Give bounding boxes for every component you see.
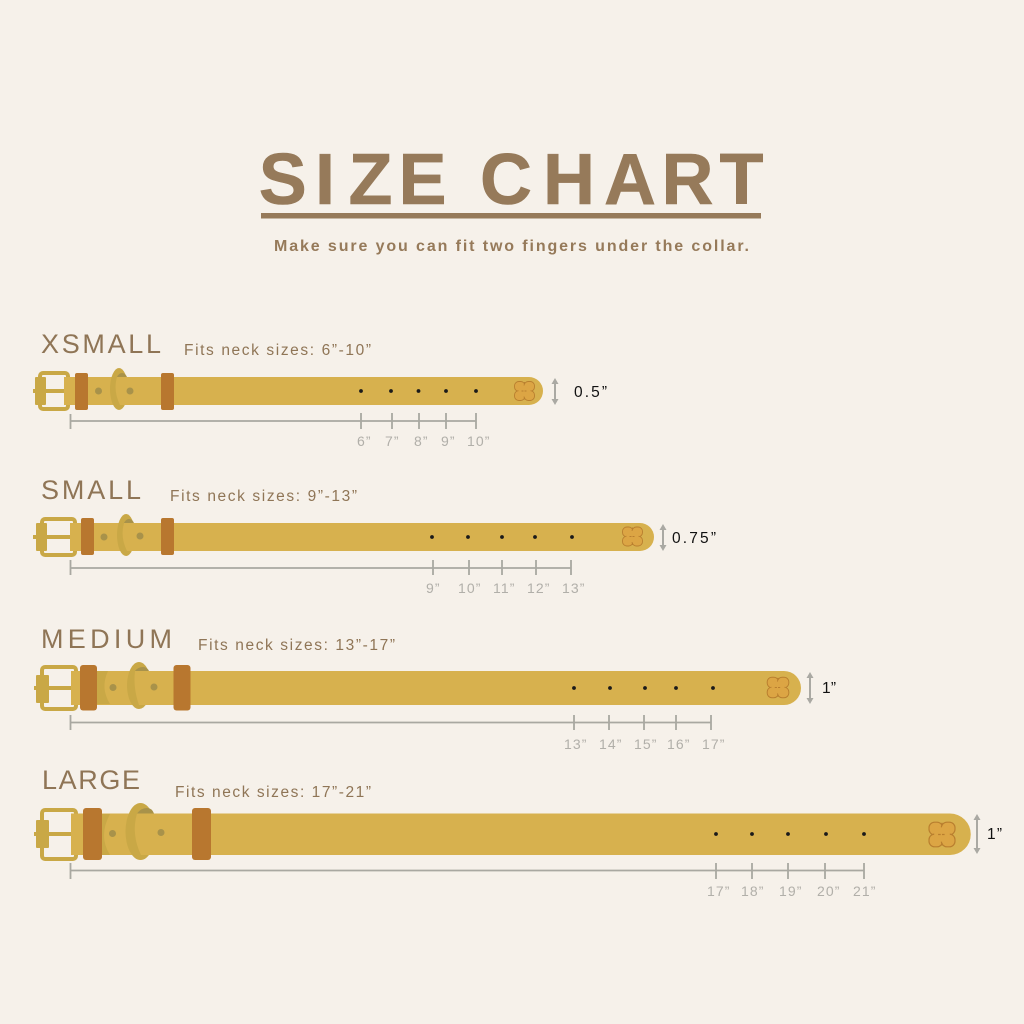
xsmall ruler labels — [357, 433, 491, 449]
xsmall ruler labels: 9” — [441, 433, 456, 449]
large ruler labels: 21” — [853, 883, 877, 899]
medium ruler labels: 17” — [702, 736, 726, 752]
small collar — [33, 514, 654, 556]
medium width arrow — [806, 672, 814, 704]
large ruler labels: 20” — [817, 883, 841, 899]
small heading: SMALL — [41, 475, 141, 505]
panel: xsmall — [33, 329, 607, 449]
large heading: LARGE — [42, 765, 140, 795]
medium ruler labels — [564, 736, 726, 752]
small width arrow — [660, 524, 666, 551]
medium ruler labels: 15” — [634, 736, 658, 752]
xsmall fit text: Fits neck sizes: 6”-10” — [184, 342, 371, 359]
large width arrow — [974, 814, 980, 854]
title: SIZE CHART — [0, 140, 764, 220]
large ruler labels: 17” — [707, 883, 731, 899]
medium collar — [34, 662, 801, 710]
small ruler labels: 12” — [527, 580, 551, 596]
small ruler labels: 13” — [562, 580, 586, 596]
medium fit text: Fits neck sizes: 13”-17” — [198, 637, 395, 654]
small ruler labels — [426, 580, 586, 596]
small fit text: Fits neck sizes: 9”-13” — [170, 488, 357, 505]
xsmall heading: XSMALL — [41, 329, 161, 359]
large ruler — [70, 863, 864, 879]
medium ruler labels: 14” — [599, 736, 623, 752]
medium heading: MEDIUM — [41, 624, 172, 654]
large ruler labels — [707, 883, 877, 899]
large fit text: Fits neck sizes: 17”-21” — [175, 784, 371, 801]
medium ruler labels: 16” — [667, 736, 691, 752]
panel: large — [34, 765, 1002, 899]
small width label: 0.75” — [672, 530, 716, 547]
xsmall ruler labels: 10” — [467, 433, 491, 449]
medium width label: 1” — [822, 680, 836, 697]
panel: medium — [34, 624, 836, 752]
small ruler — [70, 560, 571, 575]
subtitle: Make sure you can fit two fingers under the collar. — [274, 238, 749, 255]
large ruler labels: 18” — [741, 883, 765, 899]
title underline — [261, 213, 761, 218]
xsmall collar — [33, 368, 543, 410]
xsmall ruler labels: 7” — [385, 433, 400, 449]
xsmall width arrow — [552, 378, 558, 405]
xsmall width label: 0.5” — [574, 384, 607, 401]
large width label: 1” — [987, 826, 1002, 843]
panel: small — [33, 475, 716, 596]
small ruler labels: 9” — [426, 580, 441, 596]
xsmall ruler labels: 8” — [414, 433, 429, 449]
large collar — [34, 803, 971, 860]
large ruler labels: 19” — [779, 883, 803, 899]
xsmall ruler — [70, 413, 476, 429]
small ruler labels: 11” — [493, 580, 516, 596]
xsmall ruler labels: 6” — [357, 433, 372, 449]
medium ruler — [70, 715, 711, 730]
small ruler labels: 10” — [458, 580, 482, 596]
medium ruler labels: 13” — [564, 736, 588, 752]
